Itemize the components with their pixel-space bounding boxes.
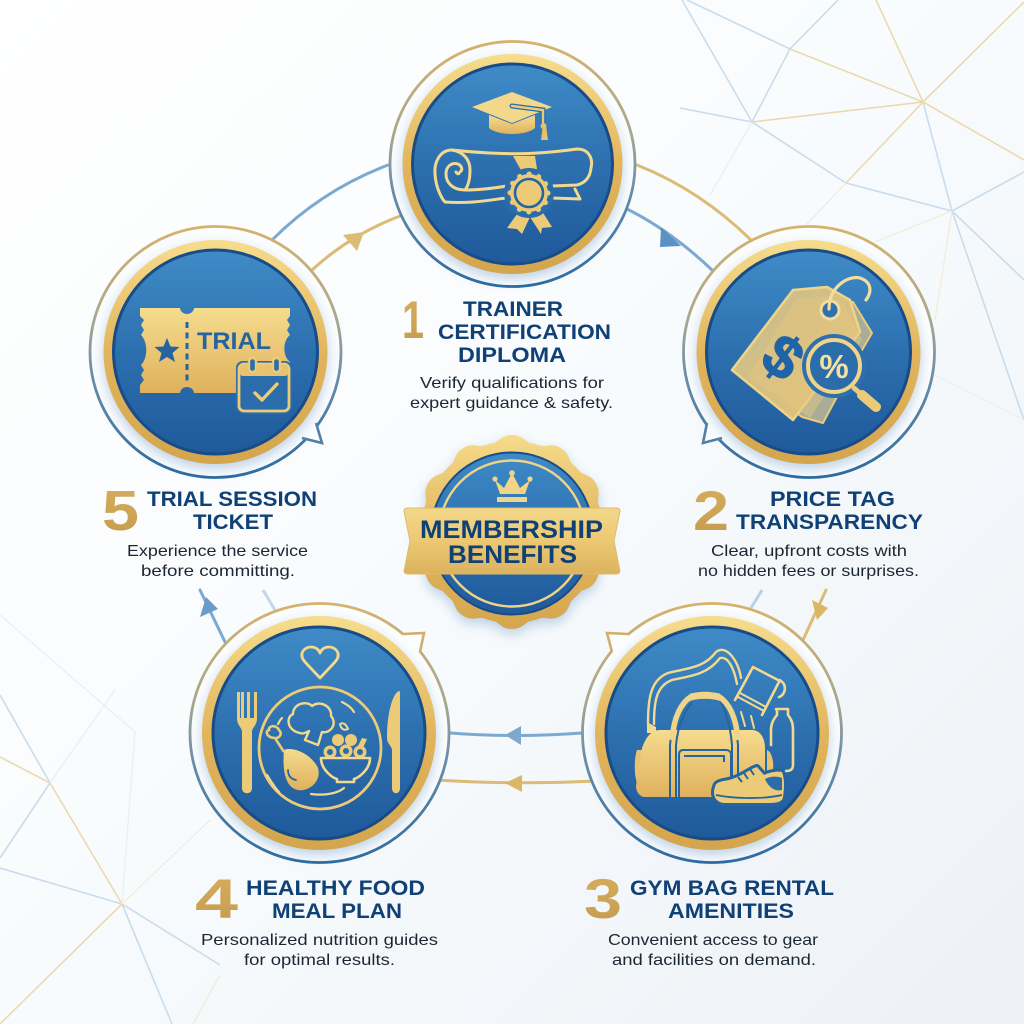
- number 1: 1: [402, 291, 424, 350]
- number 5: 5: [102, 479, 139, 543]
- icon: crown: [492, 470, 533, 502]
- heading: price tag transparency: [736, 487, 923, 534]
- description 4: [201, 932, 438, 969]
- connector: gym bag to meal plan: [437, 726, 595, 792]
- description 4: Personalized nutrition guides: [201, 932, 438, 949]
- description 5: before committing.: [141, 563, 295, 580]
- heading: trainer certification diploma: TRAINER: [463, 297, 563, 321]
- badge seal: [410, 430, 614, 634]
- description 3: Convenient access to gear: [608, 932, 819, 949]
- medallion 3: [582, 604, 842, 862]
- icon: gym bag, towel, bottle and shoe: [635, 650, 793, 803]
- connector: diploma to price tag: [625, 165, 751, 270]
- description 1: Verify qualifications for: [420, 375, 605, 392]
- icon: price tags with magnifier: $: [750, 320, 817, 394]
- connector: trial to diploma: [272, 165, 400, 270]
- heading: trial session ticket: [147, 487, 317, 534]
- heading: price tag transparency: TRANSPARENCY: [736, 510, 923, 534]
- medallion 4: [190, 604, 449, 862]
- panel: healthy food meal plan: [190, 604, 449, 969]
- heading: trial session ticket: TRIAL SESSION: [147, 487, 317, 511]
- icon: trial ticket with calendar: TRIAL: [197, 328, 271, 355]
- panel: gym bag rental amenities: [582, 604, 842, 969]
- description 4: for optimal results.: [244, 952, 395, 969]
- icon: plate with food, fork, knife and heart: [237, 647, 400, 809]
- heading: trainer certification diploma: DIPLOMA: [458, 343, 566, 367]
- central badge: membership benefits: [404, 430, 620, 634]
- medallion 5: [90, 226, 341, 478]
- heading: healthy food meal plan: [246, 876, 425, 923]
- number 2: 2: [693, 479, 729, 542]
- badge ribbon with title: BENEFITS: [448, 541, 577, 569]
- panel: price tag transparency: [684, 226, 934, 580]
- number 4: 4: [195, 867, 238, 930]
- connector: price tag to gym bag: [751, 590, 828, 640]
- heading: trainer certification diploma: [438, 297, 611, 367]
- medallion 2: [684, 226, 934, 478]
- heading: healthy food meal plan: MEAL PLAN: [272, 899, 402, 923]
- description 3: [608, 932, 819, 969]
- heading: trainer certification diploma: CERTIFICATION: [438, 320, 611, 344]
- icon: price tags with magnifier: %: [819, 348, 849, 385]
- icon: price tags with magnifier: [732, 278, 876, 423]
- badge ribbon with title: [404, 508, 620, 574]
- badge ribbon with title: MEMBERSHIP: [420, 516, 603, 544]
- heading: gym bag rental amenities: GYM BAG RENTAL: [630, 876, 834, 900]
- description 3: and facilities on demand.: [612, 952, 816, 969]
- icon: graduation cap and diploma: [435, 92, 592, 234]
- description 5: [127, 543, 308, 580]
- badge disc: [431, 452, 593, 614]
- description 2: no hidden fees or surprises.: [698, 563, 919, 580]
- connector: meal plan to trial: [200, 590, 275, 642]
- heading: price tag transparency: PRICE TAG: [770, 487, 895, 511]
- panel: trainer certification diploma: [390, 42, 635, 412]
- number 3: 3: [584, 867, 622, 930]
- heading: trial session ticket: TICKET: [193, 510, 273, 534]
- description 2: Clear, upfront costs with: [711, 543, 907, 560]
- icon: trial ticket with calendar: [140, 308, 292, 414]
- heading: gym bag rental amenities: AMENITIES: [668, 899, 794, 923]
- medallion 1: [390, 42, 635, 286]
- description 5: Experience the service: [127, 543, 308, 560]
- heading: healthy food meal plan: HEALTHY FOOD: [246, 876, 425, 900]
- description 1: expert guidance & safety.: [410, 395, 613, 412]
- heading: gym bag rental amenities: [630, 876, 834, 923]
- description 2: [698, 543, 919, 580]
- panel: trial session ticket: [90, 226, 341, 580]
- description 1: [410, 375, 613, 412]
